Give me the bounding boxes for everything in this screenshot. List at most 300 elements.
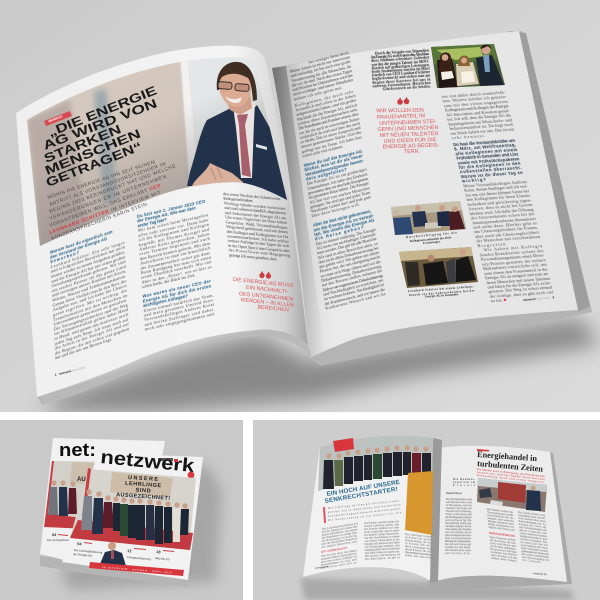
left page column 1: zur Klimaneutralität gehen dabei Hand	[54, 306, 129, 337]
left page intro: Die Auszeichnung ist ein Ansporn für alle.	[328, 511, 403, 522]
right page column 1: die sich seit Jahren gut	[445, 543, 471, 546]
pull quote: left page: EIN NACHHALTI-	[246, 285, 289, 295]
pull quote: left page: DIE ENERGIE AG MUSS	[233, 277, 294, 289]
right page column A: Kolleginnen, die mich sehr	[295, 88, 354, 109]
right page column C: ten von daher durch sonnenfolk-	[441, 90, 506, 99]
panel: open magazine, small view	[253, 420, 600, 600]
left page column 1: Genau diese Vielfalt macht den Reiz der	[52, 278, 127, 308]
right page column A: Die Kundinnen und Kunden wissen, dass	[298, 111, 359, 132]
photo: colleagues at table	[391, 201, 466, 235]
right page column C: Kolleginnen und Kollegen der Energie	[444, 103, 509, 113]
right page column 1: eine vorausschauende	[445, 537, 472, 540]
left page column 2: viel Erfahrung sammeln. Die	[365, 544, 401, 549]
left page column 3: ihren Leistungen und	[405, 545, 432, 551]
left page column 2: Andreas Kolar gesprochen, haben	[139, 231, 210, 253]
pull quote: left page	[233, 271, 294, 314]
caption above photo: unserem Unternehmen. Herzlichen	[372, 81, 431, 88]
right page column C: geistern. Der Weg ist schon einmal	[488, 285, 554, 294]
right page column C: und Ideen für die Energie AG zu be-	[487, 280, 552, 290]
cover logo	[158, 458, 194, 478]
photo: CEO portrait	[27, 58, 287, 246]
left page column 1: die Betreuung ist großartig,	[322, 534, 358, 543]
right page column C: nen. Weiters möchte ich gemein-	[442, 94, 508, 104]
left page column 2: als hundert junge Menschen,	[364, 532, 400, 537]
left page column 1: den Vorstand der Energie AG	[50, 236, 107, 260]
right page column C: Wir haben mit Kollegin	[483, 243, 544, 252]
right page column C: Personalmanagements einen Diver-	[480, 253, 546, 262]
left page column 1	[321, 522, 359, 570]
left page column 3	[405, 533, 432, 560]
left page column 2: Was waren als neuer CEO der	[142, 279, 211, 299]
left page column 2: alles sehr vertraut vor. Dann habe	[138, 217, 209, 238]
left page column 1: die Arbeit in der Energie AG und auf	[55, 321, 129, 351]
left page column 1: immer wieder zu neuen Aufgaben geführt,	[51, 249, 125, 280]
left page column 3: den ersten Wochen der Arbeitsweise	[223, 191, 281, 201]
headline: AG WIRD VON	[41, 96, 159, 153]
right page column 3: ist unser Ziel, das wir	[521, 541, 548, 547]
right page column 3: sichere Lösungen. Das	[520, 538, 548, 544]
left page column 2: Vorstandskollegen Andreas Kolar	[144, 302, 215, 322]
right page column A: um die Energie AG zu verwal-	[313, 213, 375, 233]
cover headline: AUSGEZEICHNET!	[116, 492, 170, 502]
cover portrait	[100, 542, 126, 566]
right page column A: unsere gemeinsame Stärke. Und das	[301, 129, 362, 149]
right page column A: auf den Prozess stellen, nehmen die	[321, 268, 383, 289]
caption above photo: beglückwünscht und stehen nun am	[372, 74, 430, 81]
front cover	[62, 447, 203, 580]
right page column A: Aber du bist nicht gekommen,	[313, 209, 371, 228]
right page column 1: gute Strategien und auch	[445, 534, 472, 537]
intro text: BEGINN 2023 BEEINDRUCKT HAT UND WELCHE	[49, 163, 177, 215]
right page column A: der Kundenwunsch, und wir bauen die	[324, 286, 385, 307]
left page column 3: Uhr ersten Tagen hier im Haus haben	[225, 215, 288, 225]
right page column C: zum einem den Frauenanteil in der	[483, 266, 549, 276]
pull quote: right page: FRAUENANTEIL IM	[377, 113, 426, 121]
pull quote: right page: ENERGIE AG BEGEIS-	[383, 143, 440, 150]
pull quote: right page: UNTERNEHMEN STEI-	[379, 119, 437, 127]
left page column 2: besten Lehrlinge geehrt, und	[364, 523, 400, 528]
right page thickness	[428, 452, 572, 590]
right page intro	[477, 468, 545, 484]
caption: canteen visit: Leonhard Schitter bei einem Lehrlings-	[408, 284, 474, 293]
suit	[187, 62, 290, 205]
cover red bar: IM INTERVIEW · DAHOAM · APRIL 2025	[102, 566, 173, 575]
caption: canteen visit: Energie AG in Gmunden.	[425, 292, 459, 298]
left page column 1: Gestaltungsspielraum geboten. Wir sind	[51, 258, 126, 289]
headline: MENSCHEN	[43, 127, 143, 178]
pull quote: right page: MIT NEUEN TALENTEN	[380, 131, 439, 139]
right page column 3: und Überzeugung für	[522, 556, 549, 562]
left page column 2: und mein gesamtes Umfeld dazu.	[144, 297, 214, 318]
right page column 2: stark vom Wetter und	[490, 542, 517, 548]
pull quote: right page: TERN.	[404, 149, 420, 155]
caption above photo: wurden die jungen Talente im MINT-	[371, 59, 430, 67]
left page column 1: ein starker Partner für das ganze Land	[52, 263, 127, 293]
right page column 3: bieten unseren Kunden	[520, 532, 548, 538]
left page column 2: die ihre Ausbildung in einem	[364, 535, 400, 540]
left page column 2: Beim Rundgang hat man sich einen	[141, 254, 212, 275]
left page column 1: MIT LEIDENSCHAFT	[321, 547, 348, 554]
left page column 3: in der Open Space zum Gespräch oder	[228, 243, 290, 253]
right page column 1: die Bedingungen ändern	[446, 516, 472, 519]
right page column 2: Dafür analysieren wir	[488, 523, 515, 529]
right page column 1: wichtige Aufgabe für die	[445, 525, 472, 528]
caption above photo: Bereich mit großartigen Leistungen,	[372, 63, 430, 70]
right page column A: und Wochen im Unternehmen wird das	[292, 72, 353, 92]
right page column 1: seit Monaten sehr stark	[446, 501, 473, 504]
headline: GETRAGEN“	[44, 139, 144, 190]
right page caption: experten im	[453, 481, 476, 484]
left page column 3: Anerkennung, die sie	[405, 539, 432, 545]
right page photo	[477, 478, 547, 512]
pull quote: right page: WIR WOLLEN DEN	[376, 108, 424, 114]
left page column 1: hat und die mir am Herzen liegt.	[55, 336, 112, 361]
right page column C: bleiben wird. Ich habe die Öffnung	[469, 207, 535, 216]
right page column 3: sich laufend über neue	[518, 517, 546, 523]
right page column A: gelingt nur im Team. Ich habe hier	[301, 134, 363, 154]
right page column C: len uns mit dieser kleinen Geste bei	[465, 188, 530, 198]
headline	[41, 83, 159, 190]
right page column A: noch wichtiger, und unsere Mitarbeiter	[293, 77, 354, 98]
left page column 1: jeden Tag aufs Neue. Ich freue mich auf	[53, 316, 129, 347]
right page column 1: Versorgung aller Kunden	[445, 528, 472, 531]
left page column 1: Leonhard Schitter: Ein sehr langes	[51, 239, 125, 269]
cover title: netzwerk	[100, 447, 196, 477]
headline: STARKEN	[42, 122, 123, 166]
left page column 2: Auch heuer wurden wieder die	[364, 520, 400, 525]
left page column 3: Wegscheid gebührend, und mit denen	[226, 224, 289, 236]
left page intro: Landeslehrlingswettbewerb mehrfach geehrt.	[328, 507, 402, 518]
left page column 2	[364, 520, 401, 561]
red accent line	[323, 507, 326, 523]
caption above photo: hat Energie AG zwei Frauen den Abschluss	[371, 52, 430, 60]
right page column 2: immer mehr Tempo.	[491, 557, 518, 563]
intro text: ANTRITT ALS VORSTANDSVORSITZENDER IM	[49, 161, 167, 208]
left page column 2: die Freude darüber war sehr	[364, 526, 399, 531]
left page photo	[318, 435, 433, 491]
left page footer: 14 netzwerk	[315, 565, 329, 570]
red category tag	[477, 449, 489, 452]
right page column 1: in Bewegung, und das	[446, 504, 472, 507]
left page column 2: von vielen Lehrberufen in der	[364, 538, 400, 543]
cover red bar	[89, 562, 184, 576]
right page column A: Idee dazu beitragen will.	[311, 202, 360, 219]
back cover: 04	[52, 533, 57, 537]
right page column C: bedanken und gleichzeitig signa-	[467, 197, 532, 207]
right page column 3: die Zukunft.	[522, 559, 543, 564]
right page column A: die Reise gehen?	[315, 225, 364, 242]
left page column 1: Transformation mit den Menschen im	[53, 292, 128, 322]
icon: quotation cherries	[397, 97, 409, 105]
left page column 1: und die Ausbildner begleiten	[322, 537, 358, 546]
left page column 3: zusammenarbeiten. Ich habe seither	[227, 233, 290, 244]
right page column C: alle Kolleginnen mit einem	[455, 147, 518, 156]
right page column 3: Markt reagieren und	[519, 529, 547, 535]
left page column 2: Mir kam schon beim Hereingehen	[138, 212, 209, 233]
right page column 2: MÄRKTE IN BEWEGUNG	[489, 532, 515, 538]
left page column 3: sich über die große	[405, 536, 432, 542]
right page column C: aber auch um Chancengleichheit	[475, 230, 540, 239]
right page column C: Industriestandort ist. Da liegt noch	[449, 122, 514, 131]
left page column 1: Wer bei uns lernt, hat immer	[321, 549, 357, 558]
spine	[430, 438, 442, 582]
right page column 2: Erneuerbare Energie	[490, 548, 517, 554]
red category tag: BERICHT	[48, 114, 64, 123]
left page column 2: erste Termine begonnen und auch	[139, 236, 211, 257]
cover teasers: 18	[156, 549, 162, 554]
caption above photo: Glückwunsch an die beiden.	[383, 85, 431, 91]
left page column 1: Die Lehrlingsausbildung hat	[322, 522, 358, 531]
right page column 1: sich von Tag zu Tag. Die	[445, 519, 472, 522]
right page column 2: Viele Faktoren wirken	[489, 536, 516, 542]
right page column A: uns gelebt wird. Wir geben uns einem	[319, 249, 380, 269]
right page column 3: Kraft verfolgen werden,	[521, 547, 549, 553]
left page column 1: ausgezeichnete Perspektiven	[321, 552, 357, 561]
pull quote: right page: UND IDEEN FÜR DIE	[383, 136, 437, 145]
caption above photo	[371, 48, 432, 92]
right page column C: den Kolleginnen für ihren Einsatz	[466, 193, 531, 202]
right page column C: Biografien.	[477, 241, 508, 248]
right page column A: AG hat viel von starken Menschen	[309, 185, 371, 205]
right page column A	[289, 49, 387, 311]
left page column 3: leicht gemacht haben.	[223, 196, 254, 203]
left page column 1: und eine sichere Zukunft im	[321, 555, 358, 564]
right page column C: Warum ist dir dieser Tag so	[460, 170, 524, 179]
right page column C: ten. Ich will, dass die Energie AG die	[447, 113, 512, 123]
right page column A: aufgenommen haben, sind ein großer	[296, 97, 357, 118]
right page column C: der richtige, aber es gibt noch viel	[489, 289, 555, 300]
right page column 3: zusammen und tauscht	[518, 514, 546, 520]
right page column 2: täglich alle Daten und	[488, 526, 515, 532]
left page column 2: groß. Insgesamt sind es mehr	[364, 529, 399, 534]
right page column C: Kolar, Stefan Stallinger und ich wol-	[464, 184, 529, 194]
caption above photo: feierlich von CEO Leonhard Schitter	[372, 70, 431, 78]
pull quote: right page	[376, 97, 440, 155]
right page column A: Wir sind in allen Bereichen aktiv, so	[317, 240, 379, 261]
left page intro	[328, 499, 403, 522]
intro text	[47, 159, 177, 242]
right page column A: verlässlich da sind und dass das auch	[299, 120, 361, 140]
left page column 1: Wärme, Wasser und Telekommunikation.	[52, 273, 126, 304]
left page	[303, 435, 433, 582]
left page column 1: das wissen auch alle zu	[321, 561, 357, 570]
right page column A: wo man sich Wege öffnen und wir die	[320, 259, 381, 279]
right page footer: netzwerk April 2025 5	[523, 295, 555, 302]
left page column 3: haben. Wir sind stolz	[405, 554, 432, 560]
right page column 3	[518, 511, 550, 565]
right page column A: Wenn du auf die Energie AG	[304, 148, 363, 168]
right page column 1	[445, 492, 473, 555]
pull quote: left page: WERDEN – IN ALLEN	[240, 297, 294, 309]
article title: EIN HOCH AUF UNSERE	[326, 479, 400, 498]
right page column C: Frühstück in Gmunden und Linz	[456, 152, 519, 161]
left page column 2: den Betrieb kennen gelernt. Mit dem	[140, 240, 211, 261]
right page column C: und stehe dazu. Hierbei geht es	[472, 220, 538, 230]
left page column 1: Warum hast du eigentlich zum	[50, 229, 113, 255]
right page column A: zu wachsen können. Nachhaltigkeit ist	[324, 282, 385, 302]
left page column 2: begrüßt, mit Thomas Kriegel und	[139, 226, 210, 248]
left page column 2: Herzlichen Glückwunsch an	[365, 553, 401, 558]
cover headline: UNSERE	[128, 475, 159, 483]
right page column 3: maßgeschneiderte und	[520, 535, 548, 541]
right page caption	[453, 478, 476, 487]
right page column 1: Wir blicken nach vorne	[445, 549, 472, 552]
left page column 2: Zukunft gehört den Fachkräften	[365, 547, 400, 552]
right page column A: wir für sie auch in schwierigen Zeiten	[299, 116, 360, 136]
panel dividers	[0, 412, 600, 600]
caption above photo: beide Studentinnen wurden im März	[372, 67, 430, 74]
right page column C: des Unternehmens schon bei der	[470, 211, 536, 221]
right page caption: Einsatz	[453, 484, 476, 487]
right page column A: Dekarbonisierung, Dekarbonisierung	[321, 263, 383, 284]
pull quote: left page: GES UNTERNEHMEN	[239, 291, 294, 303]
pull quote: left page: BEREICHEN	[257, 304, 289, 314]
cover photo	[70, 468, 196, 550]
right page column A: Vorstandsvorsitzender beson-	[305, 158, 364, 177]
left page footer: 4 netzwerk April 2025	[54, 365, 86, 377]
right page column A: und Nachhaltigkeit zu erreichen, um	[323, 277, 384, 298]
right page column 2: Der Handel sichert die	[487, 508, 514, 514]
right page column C: für die Kolleginnen in den	[458, 161, 521, 170]
left page column 2: wichtigsten Anliegen?	[142, 293, 189, 309]
right page column A: Das ist einmal eindeutig. Die Energie	[315, 227, 376, 246]
right page column C: Maßnahmen entwickeln soll, um	[482, 262, 548, 272]
left page column 2: und Stefan Stallinger sind dabei.	[144, 306, 215, 327]
right page column A: die wir da sind. Nach den ersten Tagen	[291, 68, 353, 88]
right page column A: Die Energie AG ist ein großartiges	[306, 166, 367, 186]
right page column 1: Preise schwanken und	[446, 513, 472, 516]
right page stack	[310, 31, 592, 366]
right page column C: AG Innovation und Kreation gestal-	[445, 108, 511, 117]
right page title: Energiehandel in	[477, 449, 538, 463]
orange info box	[405, 471, 433, 535]
intro text: VORANTREIBEN WILL, DAS ERKLÄRT CEO	[48, 182, 162, 229]
right page column A: ten. Wo nimmt die Energie AG	[314, 217, 375, 237]
caption: colleagues at table	[406, 231, 458, 245]
right page column A: Konkurrenz Wunsch und wir ba	[325, 291, 386, 311]
cover headline	[116, 475, 170, 502]
right page column C: Sandra Brandstetter seitens des	[479, 248, 544, 257]
cover teasers: Energieeinsparung	[127, 555, 151, 561]
left page stack	[37, 330, 312, 405]
right page	[272, 31, 578, 358]
caption: canteen visit	[408, 284, 476, 298]
left page column 2: Aufsichtsrat ist man ein hinsichtlich	[140, 245, 211, 266]
right page column A: blickst, was ist dir als neuer	[304, 153, 363, 173]
intro text: WOHIN DIE ENERGIE AG IHN SEIT SEINEM	[47, 159, 156, 201]
right page column A: freundlich und offen in der Arbeit	[295, 93, 357, 113]
right page column C: um Chancengleichheit für Frauen,	[474, 225, 539, 235]
right page column A: Unternehmen. Ich habe den Eindruck	[307, 171, 369, 191]
right page column 3: gemeinsam im Team und	[521, 550, 549, 556]
back cover: AU	[77, 477, 86, 483]
left page column 2: Aber in den „Nöten“, wie es hier so	[141, 264, 213, 286]
right page column 3: mit voller Leidenschaft	[522, 553, 549, 559]
left page column 2: schön heißt, der Blick ins Ziel.	[142, 272, 196, 290]
left page column 1: und die Energie AG hat mir einen großen	[51, 254, 126, 284]
right page column A: gewonnen, dass wir eine hohe Kompetenz	[308, 176, 369, 197]
article title: SENKRECHTSTARTER!	[324, 486, 398, 505]
right page title: turbulenten Zeiten	[477, 458, 544, 474]
right page column A: Meine Arbeit ist nicht nur interessant	[289, 54, 351, 74]
back cover: net:	[59, 440, 96, 460]
left page column 2: Energie AG machen und dabei	[365, 541, 400, 546]
right page column 1: Die Energiemärkte sind	[446, 498, 473, 501]
right page column C: sity-Prozess gestartet, der weitere	[481, 257, 546, 268]
left page column 1: Aufgabe aus, und ich habe die Chance	[53, 283, 127, 314]
right page column C: wichtig?	[460, 177, 487, 184]
right page column C: für Menschen mit verschiedenen	[476, 234, 541, 244]
left page column 3: und sind selbstverständlich abgestimmt	[224, 205, 287, 216]
left page column 1: und versorgen unsere Kunden mit Strom,	[52, 268, 126, 299]
headline: „DIE ENERGIE	[46, 83, 159, 140]
left page	[16, 46, 308, 397]
right page column A: nehme ich sehr gerne mit.	[294, 85, 343, 102]
left page intro: Die Lehrlinge der Energie AG haben wieder	[328, 499, 400, 510]
right page column A: men werden. Das gilt für alle Bereiche.	[317, 236, 378, 256]
caption above photo: ihres Studiums erleichtert. Gefördert	[371, 56, 430, 63]
caption: canteen visit: besuch vor der Lehrwerkstätte bei der	[409, 288, 476, 297]
caption above photo: Durch die Vergabe von Stipendien	[375, 49, 429, 56]
left page column 2: erster Tag hier?	[137, 217, 167, 228]
left page column 3: Gespräche, Wahl, Vorstandskollegen	[225, 219, 289, 231]
cover headline: LEHRLINGE	[125, 481, 162, 489]
left page column 2	[136, 198, 216, 332]
right page column A: schätze diese Zusammenarbeit sehr.	[297, 107, 358, 126]
icon: quotation cherries	[259, 271, 271, 279]
left page column 1: Unternehmen gemeinsam zu gestalten.	[53, 297, 128, 327]
left page column 1: und erfolgreiches Berufsleben hat mich	[51, 244, 126, 274]
right page column 2: Kunden, auch wenn die	[488, 517, 515, 523]
right page intro: Die Märkte sind in Bewegung, die Energiewende	[477, 468, 545, 478]
left page column 3: Die Lehrlinge freuen	[405, 533, 432, 539]
right page column A: Rückhalt für die Energie AG, und ich	[297, 102, 358, 123]
right page column 2: Preisstabilität für die	[487, 514, 514, 520]
pull quote: right page: GERN UND MENSCHEN	[377, 125, 439, 133]
left page column 2: der Zusammenarbeit sofort gut dran.	[140, 250, 211, 271]
right page column C: Antrittspressekonferenz thematisiert	[471, 216, 537, 225]
right page column 1: und das gelingt durch	[445, 531, 472, 534]
right page column 1: Daniel Moser	[446, 492, 463, 495]
left page column 3: Unternehmen bekommen	[405, 551, 432, 557]
right page column C: sowie mit Frühstückspaketen	[457, 156, 520, 165]
left page column 3: und Ankommen der Energie AG am	[224, 210, 287, 220]
left page column 2: mich sehr entgegengekommen und.	[145, 311, 215, 332]
right page column A: AG muss ein nachhaltiges Unterneh-	[316, 231, 377, 251]
right page column C: sehr bewusst.	[451, 133, 486, 140]
right page column C: deren Menschen mit neuen Talenten	[486, 276, 551, 285]
cover teasers: 12	[127, 548, 133, 553]
left page column 1: hohen Stellenwert, das zeigen	[322, 528, 358, 537]
right page footer: netzwerk 15	[533, 572, 547, 576]
right page column A: Prozess hin, der uns einzigartig macht	[319, 254, 381, 275]
left page column 2: Du bist seit 2. Jänner 2023 CEO	[137, 198, 206, 219]
right page column A: so bleibt. Das ist unser Anspruch und	[300, 125, 362, 145]
caption: colleagues at table: Kurzbesichtigung für die	[406, 231, 458, 239]
right page column C: ein Stück Arbeit vor uns. Das ist mir	[450, 126, 515, 136]
back cover: Die Lehrlingsförderung	[47, 538, 74, 542]
right page column C: Außenstellen überrascht.	[459, 165, 522, 175]
intro text: VERÄNDERUNGEN ER IM UNTERNEHMEN	[48, 173, 168, 222]
right page column C: Meine Vorstandskollegen Andreas	[463, 179, 528, 188]
panel: stacked magazine covers	[0, 420, 243, 600]
left page column 3: den Kollegen und Kolleginnen vor Ort	[226, 229, 289, 239]
right page column C: sam mit den vielen engagierten	[443, 99, 509, 108]
left page column 1: bei der Energie AG einen sehr	[322, 525, 358, 534]
right page column C	[440, 90, 556, 303]
left page column 1: Die Versorgungssicherheit und der Weg	[54, 302, 129, 332]
right page title	[477, 449, 544, 474]
